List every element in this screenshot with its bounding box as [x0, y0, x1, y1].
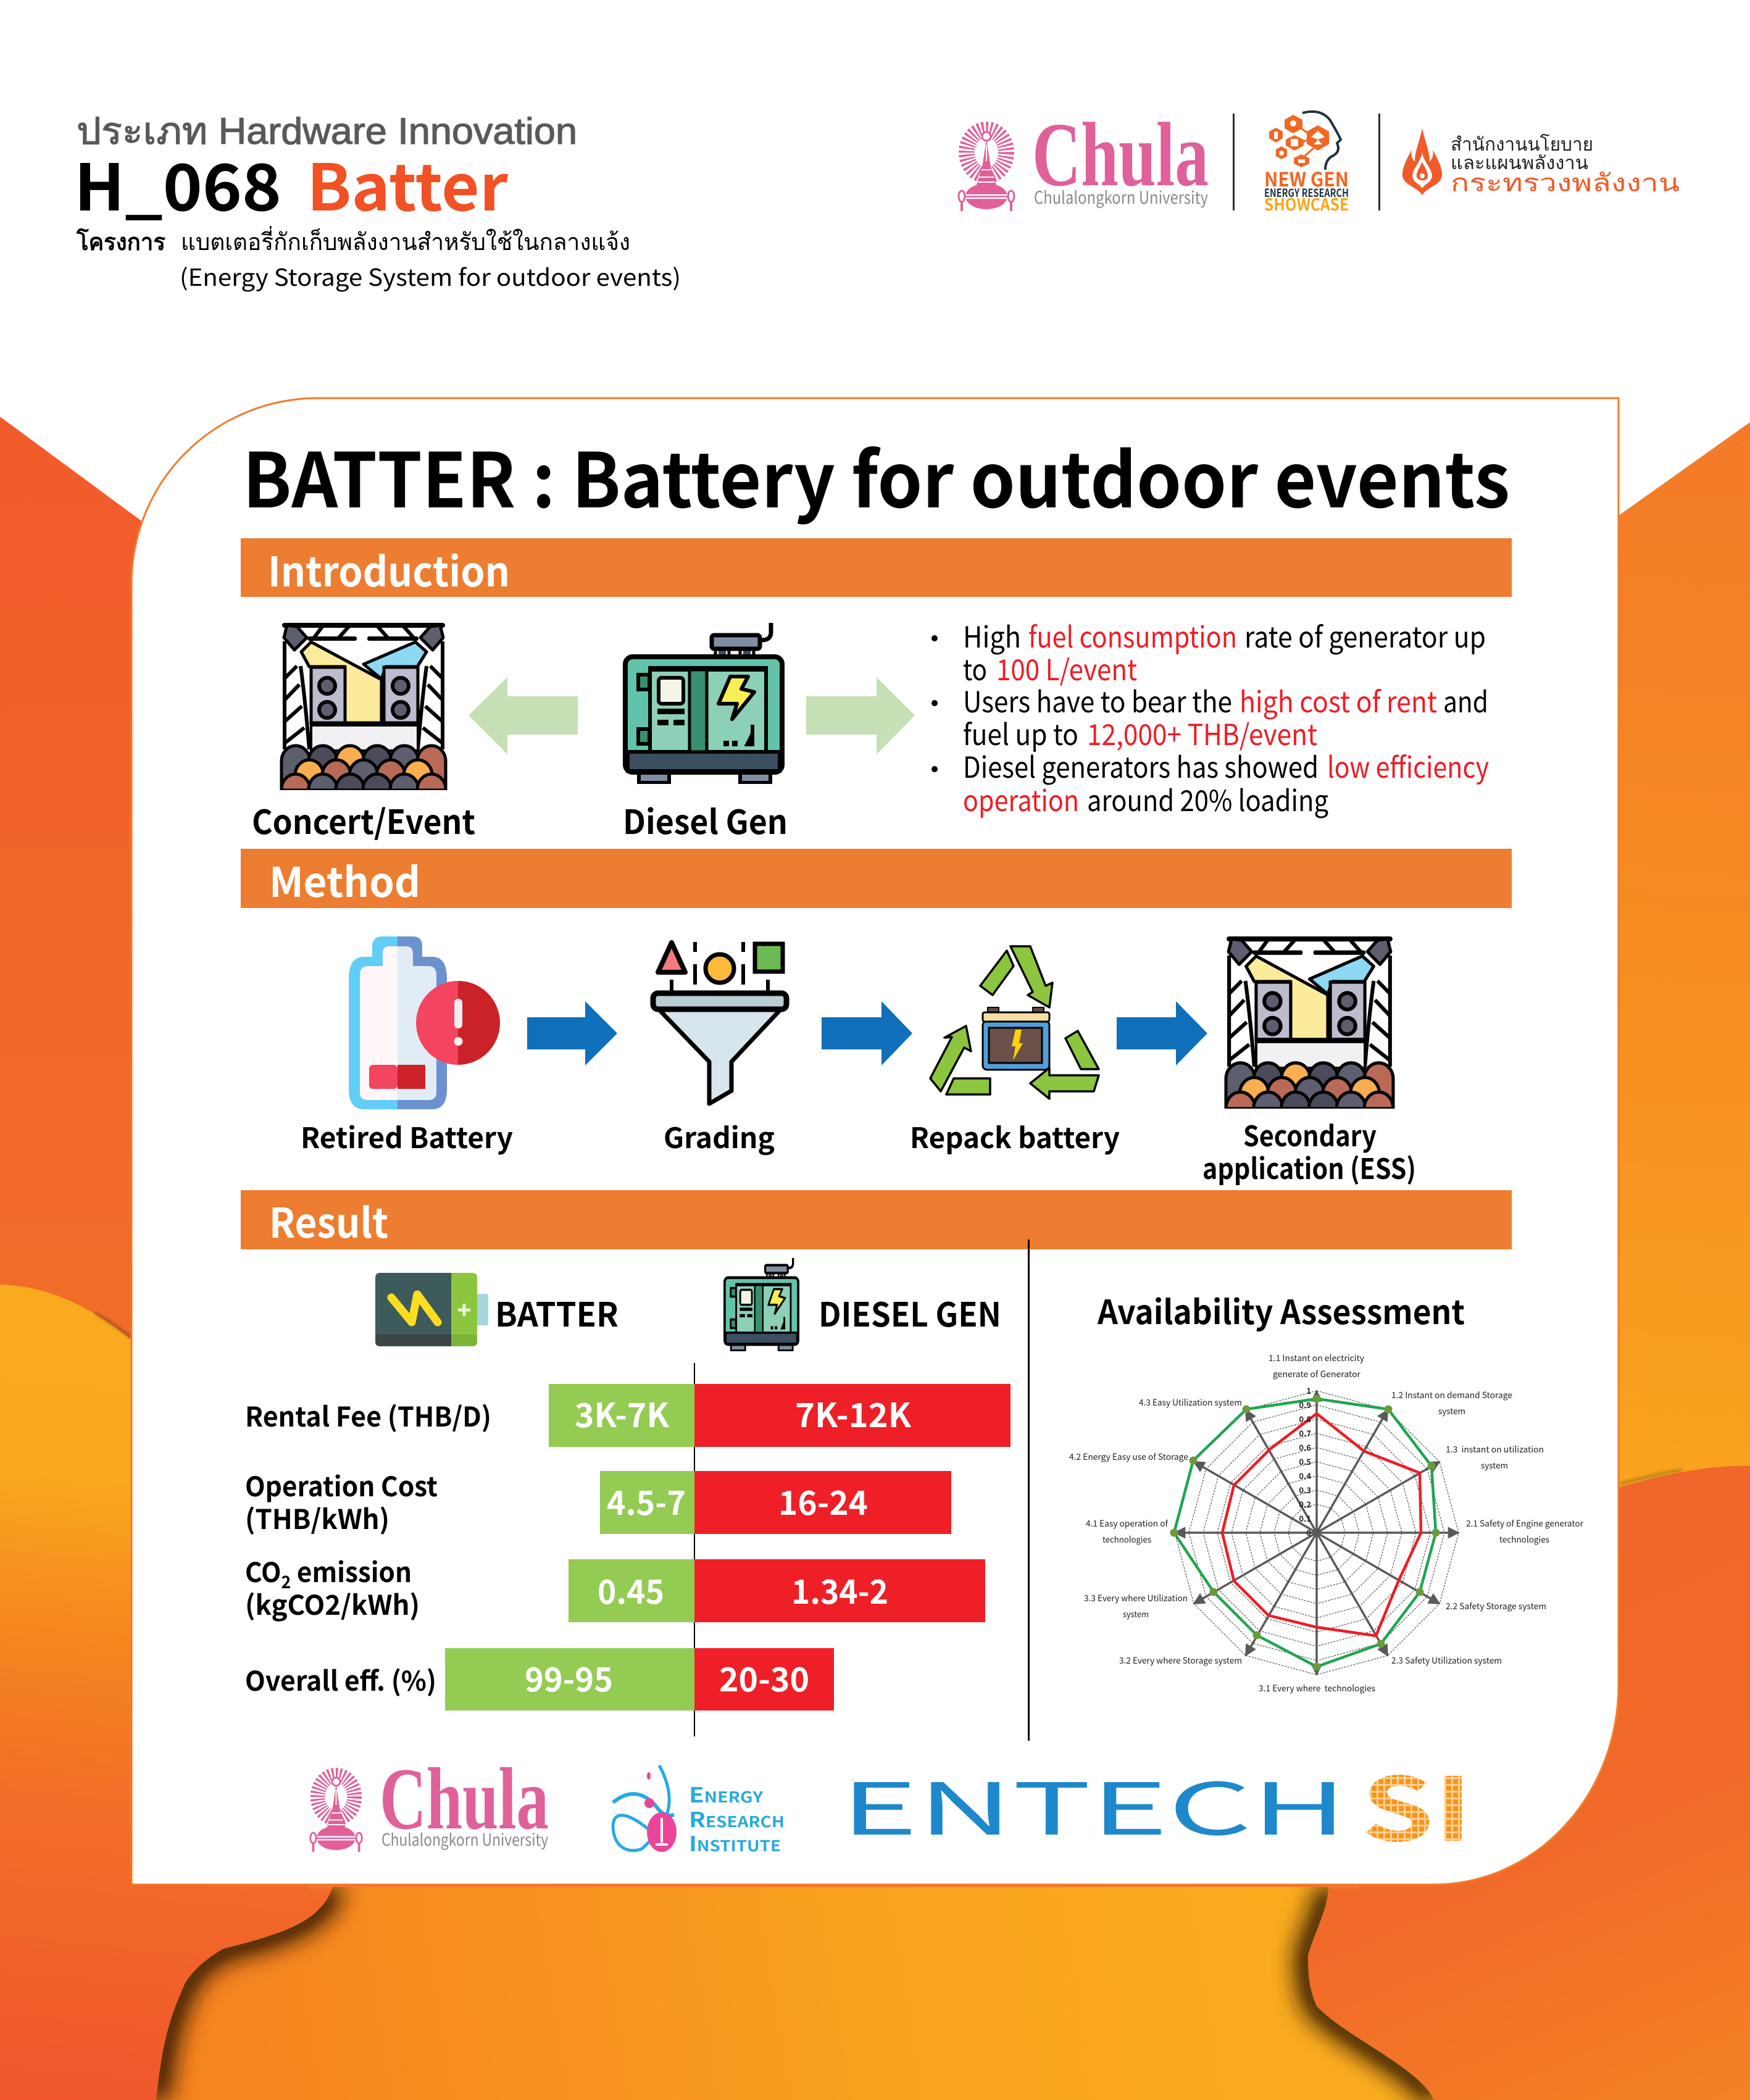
radar axis labels: 2.2 Safety Storage system [1446, 1600, 1546, 1612]
icon: secondary application stage [1226, 936, 1393, 1109]
footer logo: ENTECH: ENTECH [841, 1752, 1347, 1856]
method heading bar: Method [269, 850, 420, 909]
series: batter (green) [1170, 1395, 1440, 1670]
header: project code and name: Batter [307, 136, 509, 229]
logo: Chula header: Chulalongkorn University [1034, 185, 1208, 209]
label: Concert/Event: Concert/Event [252, 795, 475, 844]
logo text: Energy Policy and Planning Office, Ministry of Energy: กระทรวงพลังงาน [1451, 170, 1680, 197]
bullet list: generator problems: 100 L/event [996, 646, 1137, 689]
label: Secondary application (ESS) [1202, 1114, 1416, 1188]
radar axis labels: system [1123, 1608, 1149, 1620]
label: Repack battery: Repack battery [910, 1116, 1120, 1157]
icon: diesel generator [625, 623, 782, 783]
row: operation cost: Operation Cost [245, 1465, 438, 1504]
row: operation cost: 16-24 [778, 1476, 868, 1525]
header: project description: (Energy Storage System for outdoor events) [180, 259, 681, 293]
row: overall efficiency: 99-95 [525, 1652, 613, 1701]
row: operation cost: (THB/kWh) [245, 1498, 390, 1537]
label: Retired Battery: Retired Battery [301, 1116, 513, 1157]
icon: grading funnel [653, 942, 786, 1104]
row: rental fee [245, 1384, 1010, 1447]
row: overall efficiency: Overall eff. (%) [245, 1659, 436, 1699]
row: CO2 emission: (kgCO2/kWh) [245, 1583, 420, 1623]
radar axis labels: 1.2 Instant on demand Storage [1391, 1389, 1512, 1401]
bullet list: generator problems: to [963, 646, 987, 689]
radar scale labels: 0 [1306, 1527, 1311, 1538]
footer logo: SI: SI [1361, 1739, 1472, 1866]
bullet list: generator problems: high cost of rent [1240, 678, 1437, 721]
logo: Chula header: Chula [1032, 104, 1209, 206]
divider [1378, 114, 1380, 210]
radar scale labels: 0.6 [1299, 1441, 1311, 1453]
arrow: step 2 to 3 [822, 1001, 912, 1065]
bottom central yellow blob with shadowed edges [156, 1887, 1434, 2100]
footer logo: Energy Research Institute: RESEARCH [689, 1803, 785, 1833]
radar axis labels: 2.1 Safety of Engine generator [1466, 1517, 1584, 1530]
bullet list: generator problems: Users have to bear the [963, 678, 1232, 721]
label: Diesel Gen: Diesel Gen [623, 795, 788, 844]
logo: Chula header [959, 104, 1209, 211]
footer logo: Energy Research Institute: ENERGY [689, 1778, 764, 1809]
header: project description: โครงการ [76, 228, 166, 256]
row: overall efficiency [245, 1648, 834, 1710]
left yellow wave [0, 1285, 432, 2100]
label: Grading: Grading [664, 1116, 775, 1157]
bullet list: generator problems [931, 614, 1489, 820]
row: operation cost: 4.5-7 [607, 1476, 686, 1525]
radar axis labels: 4.2 Energy Easy use of Storage [1069, 1451, 1188, 1463]
radar axis labels: generate of Generator [1273, 1368, 1361, 1380]
logo: New Gen Energy Research Showcase: NEW GEN [1264, 164, 1349, 193]
footer logo: Energy Research Institute [613, 1765, 785, 1857]
row: rental fee: Rental Fee (THB/D) [245, 1395, 491, 1435]
logo: New Gen Energy Research Showcase: ENERGY RESEARCH [1264, 185, 1349, 201]
icon: batter battery [375, 1273, 488, 1346]
section: Introduction [241, 538, 1512, 844]
icon: repack battery with recycling arrows [930, 946, 1099, 1099]
header: project description: แบตเตอรี่กักเก็บพลังงานสำหรับใช้ในกลางแจ้ง [181, 226, 630, 256]
left orange wave [0, 417, 143, 1358]
logo text: Energy Policy and Planning Office, Ministry of Energy [1451, 133, 1680, 197]
radar scale labels [1299, 1385, 1311, 1538]
bullet list: generator problems: and [1443, 678, 1488, 721]
radar chart: availability assessment [1069, 1352, 1584, 1694]
header: category label: ประเภท Hardware Innovation [77, 110, 577, 152]
header: project description [76, 226, 681, 293]
result heading bar: Result [269, 1191, 388, 1250]
logo text: Energy Policy and Planning Office, Ministry of Energy: และแผนพลังงาน [1451, 153, 1588, 173]
logo: Energy Policy and Planning Office flame [1402, 128, 1442, 195]
footer logo: Energy Research Institute: INSTITUTE [689, 1827, 781, 1857]
bullet list: generator problems: low efficiency [1327, 744, 1489, 786]
row: CO2 emission: 1.34-2 [791, 1565, 888, 1614]
bullet list: generator problems: High [963, 614, 1021, 656]
footer logo: Chula: Chulalongkorn University [381, 1827, 548, 1851]
radar axis labels: 1.3 instant on utilization [1446, 1443, 1544, 1456]
row: CO2 emission: CO [245, 1551, 283, 1590]
radar axis labels: 2.3 Safety Utilization system [1391, 1654, 1502, 1667]
label: Secondary application (ESS): application (ESS) [1202, 1147, 1416, 1188]
radar scale labels: 0.1 [1299, 1512, 1311, 1524]
bullet list: generator problems: Diesel generators has showed [963, 744, 1319, 786]
radar axis labels: 3.2 Every where Storage system [1119, 1654, 1242, 1667]
arrow: step 3 to 4 [1117, 1001, 1207, 1065]
bullet list: generator problems: fuel consumption [1028, 614, 1237, 656]
radar axis labels: 3.3 Every where Utilization [1084, 1592, 1188, 1604]
radar scale labels: 0.8 [1299, 1413, 1311, 1425]
radar axis labels: system [1438, 1405, 1465, 1417]
comparison chart axis [694, 1363, 695, 1736]
introduction heading bar [241, 538, 1512, 599]
footer logo: Chula [310, 1750, 549, 1852]
row: rental fee: 7K-12K [795, 1388, 912, 1437]
label: DIESEL GEN: DIESEL GEN [819, 1288, 1001, 1336]
label: Secondary application (ESS): Secondary [1243, 1114, 1377, 1155]
radar scale labels: 0.7 [1299, 1427, 1311, 1439]
radar scale labels: 1 [1306, 1385, 1311, 1396]
radar axis labels: 4.1 Easy operation of [1086, 1517, 1168, 1530]
method heading bar [241, 849, 1512, 909]
header: project code and name: H_068 [74, 136, 281, 229]
radar axis labels [1069, 1352, 1584, 1694]
logo text: Energy Policy and Planning Office, Ministry of Energy: สำนักงานนโยบาย [1451, 133, 1593, 155]
introduction heading bar: Introduction [268, 540, 510, 599]
vertical divider between comparison and assessment [1028, 1240, 1030, 1741]
row: CO2 emission [245, 1551, 985, 1623]
row: operation cost [245, 1465, 951, 1537]
radar scale labels: 0.3 [1299, 1484, 1311, 1496]
radar scale labels: 0.5 [1299, 1456, 1311, 1467]
bullet list: generator problems: 12,000+ THB/event [1087, 711, 1317, 754]
section: Method [241, 849, 1512, 1188]
row: rental fee: 3K-7K [575, 1388, 670, 1437]
divider [1233, 114, 1235, 210]
header: project code and name [74, 136, 509, 229]
section: Result [241, 1190, 1584, 1741]
footer logo: Chula: Chula [380, 1750, 549, 1848]
radar axis labels: 4.3 Easy Utilization system [1139, 1396, 1242, 1409]
radar scale labels: 0.9 [1299, 1399, 1311, 1410]
radar axis labels: 1.1 Instant on electricity [1269, 1352, 1365, 1364]
arrow: step 1 to 2 [527, 1001, 617, 1065]
row: CO2 emission: 2 [281, 1569, 291, 1594]
radar axis labels: 3.1 Every where technologies [1259, 1682, 1375, 1694]
icon: concert stage [281, 623, 446, 790]
radar scale labels: 0.4 [1299, 1470, 1311, 1481]
result heading bar [241, 1190, 1512, 1250]
bullet list: generator problems: rate of generator up [1244, 614, 1486, 656]
right orange-yellow wave [1605, 422, 1750, 1506]
strip beneath the panel [309, 1877, 1358, 1889]
heading: Availability Assessment: Availability Assessment [1097, 1285, 1465, 1334]
icon: diesel generator small [725, 1258, 798, 1351]
row: overall efficiency: 20-30 [719, 1652, 809, 1701]
row: CO2 emission: 0.45 [598, 1565, 664, 1614]
arrow: to problems list [806, 677, 915, 754]
radar axis labels: technologies [1102, 1533, 1151, 1546]
radar axis labels: technologies [1499, 1533, 1549, 1546]
bullet list: generator problems: around 20% loading [1087, 777, 1328, 820]
main title: BATTER : Battery for outdoor events [243, 420, 1510, 530]
logo: New Gen Energy Research Showcase [1264, 112, 1349, 215]
arrow: to concert [469, 677, 578, 754]
bullet list: generator problems: operation [963, 777, 1079, 820]
logo: New Gen Energy Research Showcase: SHOWCASE [1264, 191, 1349, 215]
radar axis labels: system [1481, 1459, 1508, 1472]
icon: retired battery [349, 936, 500, 1109]
series: diesel generator (red) [1222, 1414, 1421, 1636]
label: BATTER: BATTER [495, 1288, 619, 1336]
bullet list: generator problems: fuel up to [963, 711, 1078, 754]
radar scale labels: 0.2 [1299, 1498, 1311, 1510]
right lower orange wave [1296, 1466, 1750, 2100]
main white rounded panel [131, 398, 1619, 1885]
row: CO2 emission: emission [291, 1551, 412, 1590]
